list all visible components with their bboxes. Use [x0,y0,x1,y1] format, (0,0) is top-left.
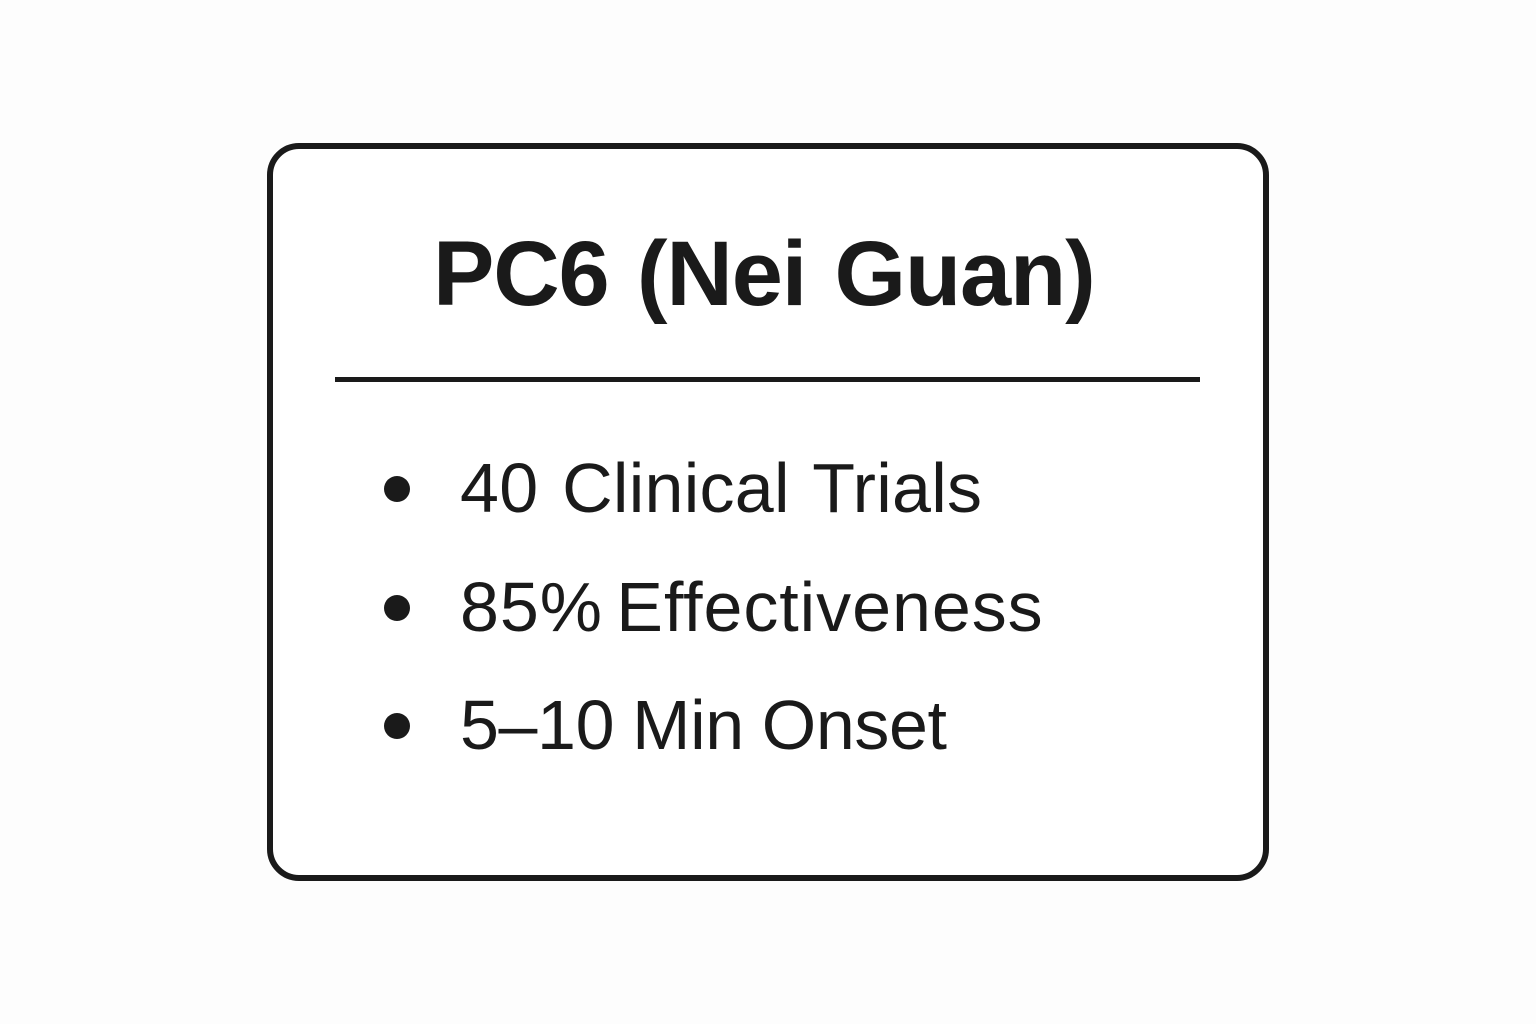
title: PC6 (Nei Guan) [433,223,1095,325]
bullet: effectiveness: 85% Effectiveness [460,568,1044,646]
bullet: clinical trials: 40 Clinical Trials [460,448,982,526]
bullet list [384,448,1044,764]
panel: PC6 card [267,143,1269,881]
bullet: onset: 5–10 Min Onset [460,686,947,764]
divider under title [335,377,1200,382]
